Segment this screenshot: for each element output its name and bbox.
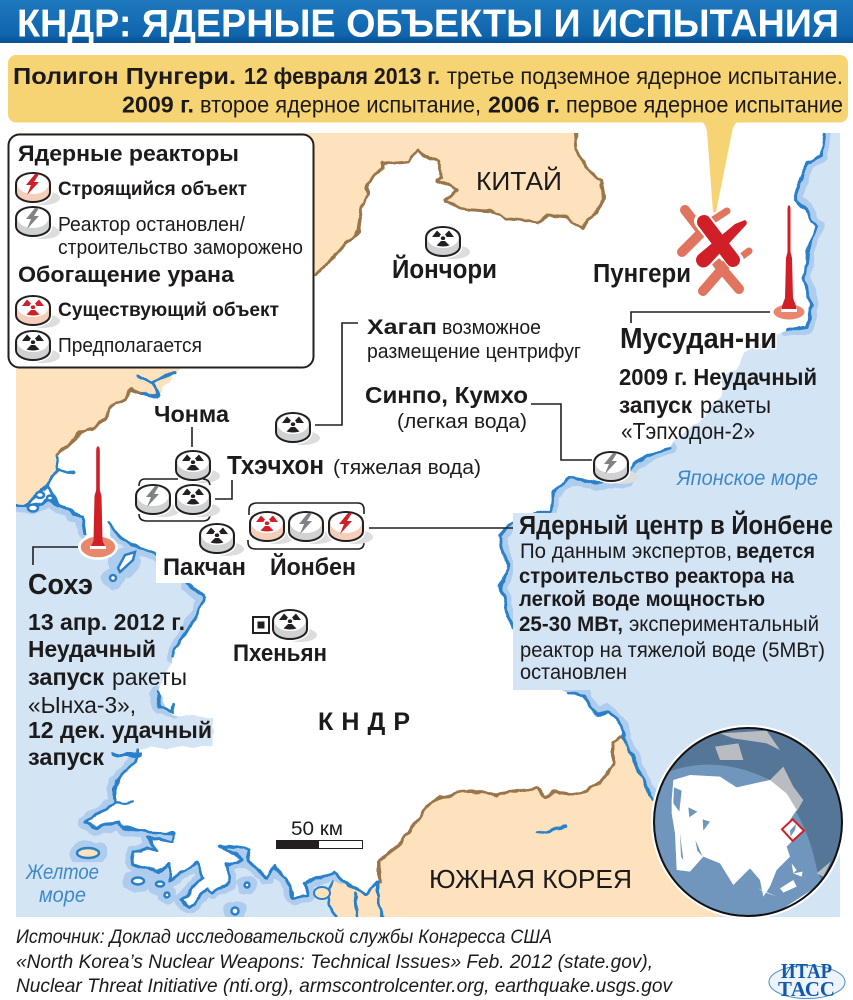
label: Punggye-ri: Пунгери [593, 260, 691, 288]
coastline [8, 125, 825, 925]
legend text: existing enrichment: Существующий объект [58, 299, 279, 321]
site: Chonma: Чонма [154, 401, 229, 427]
site: Taechon [136, 452, 481, 521]
site: Taechon: Тхэчхон [227, 452, 324, 480]
callout: Punggye-ri test site: 12 февраля 2013 г. [244, 63, 440, 89]
site: Hagap: возможное [442, 316, 541, 339]
land [8, 125, 825, 925]
label: China: КИТАЙ [476, 166, 562, 196]
text: Sohae: запуск [28, 744, 104, 770]
icon: capital city [253, 617, 269, 633]
text: Musudan-ri: «Тэпходон-2» [621, 418, 755, 444]
site: Hagap [276, 315, 581, 445]
label: Yellow Sea [22, 861, 104, 910]
legend icon: stopped reactor [16, 207, 60, 239]
label: Yellow Sea: море [39, 884, 86, 907]
legend text: under construction: Строящийся объект [58, 178, 247, 200]
callout: Punggye-ri test site: Полигон Пунгери. [13, 63, 236, 89]
panel: Yongbyon nuclear centre: 25-30 МВт, [519, 613, 623, 636]
text: Musudan-ri: 2009 г. Неудачный [619, 364, 817, 390]
site: Yongjori: Йончори [392, 254, 497, 284]
text: Musudan-ri [619, 323, 817, 444]
icon: Punggye-ri test site crosses [682, 210, 749, 291]
text: Sohae: ракеты [112, 664, 187, 690]
South Korea [328, 735, 725, 925]
site: Sinpo, Kumho: Синпо, Кумхо [365, 382, 528, 408]
panel: Yongbyon nuclear centre: строительство реактора на [519, 565, 794, 588]
panel: Yongbyon nuclear centre: легкой воде мощностью [519, 588, 765, 611]
text: Musudan-ri: Мусудан-ни [620, 323, 777, 355]
callout: Punggye-ri test site: третье подземное ядерное испытание. [447, 63, 843, 89]
text: Sohae: Сохэ [28, 569, 93, 601]
label box: Pakchan [156, 524, 250, 583]
site: Pyongyang [233, 610, 327, 667]
site: Hagap: размещение центрифуг [367, 340, 581, 363]
site: Pyongyang: Пхеньян [233, 640, 327, 667]
callout: Punggye-ri test site: 2009 г. [122, 92, 194, 118]
coastal shallows [8, 125, 825, 915]
site: Sinpo, Kumho: (легкая вода) [397, 410, 527, 433]
panel: Yongbyon nuclear centre: остановлен [520, 661, 627, 684]
rocket: Musudan-ri [772, 205, 806, 320]
site: Taechon: (тяжелая вода) [333, 456, 481, 479]
panel: Yongbyon nuclear centre: По данным экспертов, [520, 540, 732, 563]
label: South Korea: ЮЖНАЯ КОРЕЯ [429, 864, 632, 894]
site: Yongbyon [248, 503, 513, 581]
legend text: stopped reactor: Реактор остановлен/ [58, 214, 245, 236]
source: Источник: Доклад исследовательской службы Конгресса США [16, 927, 552, 948]
islands [28, 492, 330, 914]
callout: Punggye-ri test site [8, 55, 848, 212]
legend text: stopped reactor [58, 214, 303, 259]
callout: Punggye-ri test site: первое ядерное испытание [566, 92, 843, 118]
leader: Musudan-ri [631, 312, 770, 323]
source: «North Korea’s Nuclear Weapons: Technical Issues» Feb. 2012 (state.gov), [16, 952, 653, 973]
callout: Punggye-ri test site: 2006 г. [488, 92, 560, 118]
title: КНДР: ЯДЕРНЫЕ ОБЪЕКТЫ И ИСПЫТАНИЯ [17, 2, 839, 46]
legend text: suspected enrichment: Предполагается [58, 335, 202, 357]
legend heading: reactors: Ядерные реакторы [18, 141, 239, 166]
legend icon: existing enrichment [16, 296, 60, 328]
legend icon: under construction [16, 173, 60, 205]
rocket: Sohae [80, 446, 116, 558]
site: Yongbyon: Йонбен [270, 553, 356, 581]
text: Musudan-ri: запуск [619, 392, 692, 418]
text: Sohae: Неудачный [28, 636, 156, 662]
sea [16, 133, 840, 917]
locator globe [651, 725, 843, 917]
legend heading: uranium enrichment: Обогащение урана [18, 262, 234, 287]
title bar [0, 0, 853, 46]
logo: ITAR-TASS: ИТАР [781, 959, 832, 983]
source [16, 927, 673, 997]
legend [8, 134, 314, 368]
legend text: stopped reactor: строительство заморожено [58, 237, 303, 259]
China [8, 125, 603, 507]
borders [57, 125, 623, 882]
label box: Pakchan: Пакчан [163, 554, 246, 581]
label: DPRK: К Н Д Р [318, 708, 410, 736]
panel: Yongbyon nuclear centre: Ядерный центр в Йонбене [519, 510, 833, 540]
callout: Punggye-ri test site: второе ядерное испытание, [200, 92, 481, 118]
site: Hagap: Хагап [367, 315, 437, 339]
site: Sinpo, Kumho [365, 382, 638, 484]
text: Sohae: 13 апр. 2012 г. [28, 609, 185, 635]
panel: Yongbyon nuclear centre: реактор на тяжелой воде (5МВт) [520, 639, 825, 662]
map [8, 125, 840, 925]
text: Sohae [28, 569, 212, 770]
scale bar: 50 км [291, 819, 343, 840]
text: Sohae: «Ынха-3», [28, 692, 136, 718]
site: Yongjori [392, 227, 497, 284]
red cross [696, 220, 747, 268]
label: Sea of Japan: Японское море [676, 467, 818, 490]
site: Chonma [154, 401, 229, 483]
label: Yellow Sea: Желтое [25, 861, 99, 884]
panel: Yongbyon nuclear centre: ведется [736, 540, 815, 563]
logo: ITAR-TASS [769, 959, 845, 1000]
text: Sohae: 12 дек. удачный [28, 717, 212, 743]
source: Nuclear Threat Initiative (nti.org), armscontrolcenter.org, earthquake.usgs.gov [16, 976, 673, 997]
panel: Yongbyon nuclear centre [513, 510, 840, 690]
text: Musudan-ri: ракеты [700, 392, 771, 418]
scale bar [276, 819, 362, 849]
panel: Yongbyon nuclear centre: экспериментальный [629, 613, 819, 636]
leader: Sohae [33, 547, 78, 565]
text: Sohae: запуск [28, 664, 104, 690]
legend icon: suspected enrichment [16, 331, 60, 363]
